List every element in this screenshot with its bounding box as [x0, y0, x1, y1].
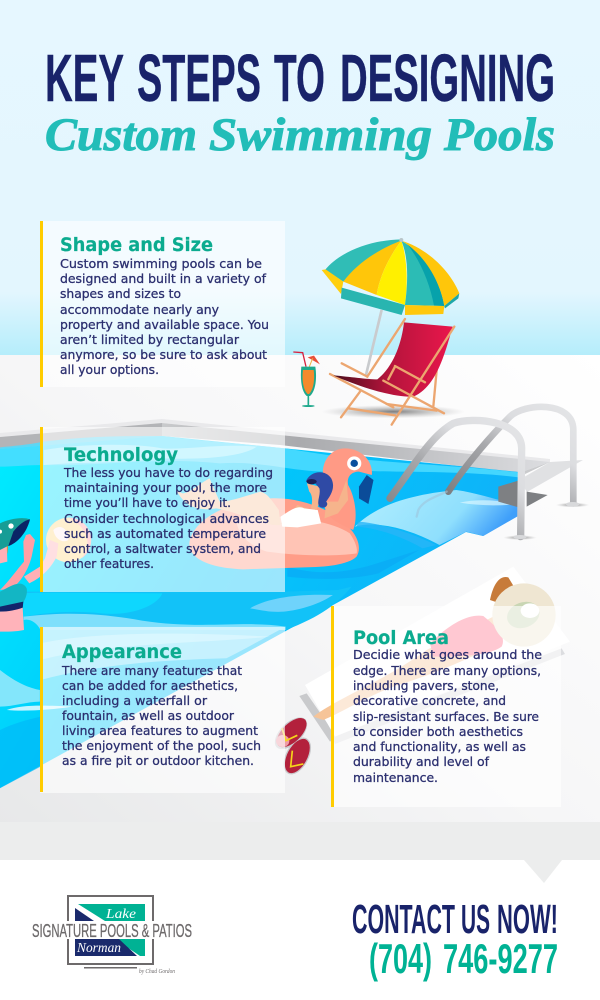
contact heading: US: [461, 896, 490, 942]
text block: appearance: can be added for aesthetics,: [62, 678, 238, 693]
logo: Signature Pools & Patios: Lake: [105, 907, 136, 922]
heading: technology: Technology: [64, 444, 179, 466]
text block: appearance: the enjoyment of the pool, such: [62, 738, 261, 753]
text block: pool area: Decidie what goes around the: [353, 647, 542, 662]
text block: technology: The less you have to do regarding: [63, 465, 273, 480]
icon: beach umbrella: [322, 238, 459, 375]
text block: pool area: to consider both aesthetics: [353, 724, 523, 739]
pool deck: [0, 355, 600, 860]
text block: appearance: There are many features that: [61, 663, 242, 678]
text block: shape and size: [60, 256, 269, 377]
contact phone number: (704): [369, 935, 432, 982]
icon: sunbather on lounger: [299, 567, 570, 744]
heading: shape and size: Shape and Size: [60, 234, 213, 256]
text block: shape and size: all your options.: [60, 362, 159, 377]
text block: pool area: including pavers, stone,: [353, 678, 499, 693]
text block: appearance: fountain, as well as outdoor: [62, 708, 235, 723]
text block: pool area: maintenance.: [353, 770, 438, 785]
logo: Signature Pools & Patios: [32, 896, 192, 975]
panel: technology: [40, 427, 285, 592]
text block: shape and size: aren’t limited by rectangular: [60, 332, 240, 347]
icon: woman with beach ball: [0, 518, 91, 632]
panel: shape and size: [40, 221, 285, 387]
text block: pool area: decorative concrete, and: [353, 693, 506, 708]
text block: technology: other features.: [64, 556, 154, 571]
contact heading: CONTACT: [352, 896, 455, 942]
panel: appearance: [40, 627, 285, 793]
subtitle: Custom Swimming Pools: Pools: [443, 109, 555, 161]
text block: pool area: edge. There are many options,: [353, 663, 541, 678]
panel: pool area: [331, 606, 561, 807]
footer band: [0, 860, 600, 1000]
text block: shape and size: shapes and sizes to: [60, 286, 181, 301]
text block: appearance: as a fire pit or outdoor kitchen.: [62, 753, 254, 768]
logo: Signature Pools & Patios: SIGNATURE POOLS & PATIOS: [32, 921, 192, 941]
text block: technology: such as automated temperature: [64, 526, 266, 541]
text block: pool area: and functionality, as well as: [353, 739, 526, 754]
title: Key Steps to Designing: STEPS: [137, 41, 261, 116]
heading: appearance: Appearance: [62, 641, 182, 663]
text block: technology: control, a saltwater system, and: [64, 541, 261, 556]
text block: shape and size: Custom swimming pools can be: [60, 256, 262, 271]
text block: shape and size: anymore, so be sure to ask about: [60, 347, 267, 362]
title: Key Steps to Designing: [45, 41, 555, 116]
text block: shape and size: designed and built in a variety of: [60, 271, 267, 286]
swimming pool: [0, 419, 583, 788]
text block: shape and size: property and available space. You: [60, 317, 269, 332]
heading: pool area: Pool Area: [353, 627, 449, 649]
title: Key Steps to Designing: TO: [274, 41, 325, 116]
text block: technology: [63, 465, 273, 571]
icon: cocktail: [293, 352, 320, 407]
text block: pool area: durability and level of: [353, 754, 490, 769]
icon: flip flops: [269, 712, 317, 779]
logo: Signature Pools & Patios: by Chad Gordon: [139, 969, 175, 975]
subtitle: Custom Swimming Pools: Custom: [45, 109, 197, 161]
text block: pool area: [353, 647, 542, 785]
text block: appearance: living area features to augment: [62, 723, 258, 738]
text block: technology: maintaining your pool, the more: [64, 480, 267, 495]
icon: flamingo float with woman: [176, 448, 373, 569]
text block: shape and size: accommodate nearly any: [60, 302, 219, 317]
text block: pool area: slip-resistant surfaces. Be sure: [353, 709, 539, 724]
title: Key Steps to Designing: KEY: [45, 41, 124, 116]
icon: deck chair: [322, 319, 465, 425]
text block: appearance: including a waterfall or: [62, 693, 208, 708]
subtitle: Custom Swimming Pools: [45, 109, 555, 161]
subtitle: Custom Swimming Pools: Swimming: [209, 109, 432, 161]
contact phone number: [369, 935, 558, 982]
icon: ladder: [390, 407, 589, 540]
logo: Signature Pools & Patios: Norman: [76, 941, 121, 956]
background: sky: [0, 0, 600, 356]
text block: appearance: [61, 663, 261, 768]
text block: technology: Consider technological advances: [64, 511, 269, 526]
text block: technology: time you’ll have to enjoy it.: [64, 495, 231, 510]
